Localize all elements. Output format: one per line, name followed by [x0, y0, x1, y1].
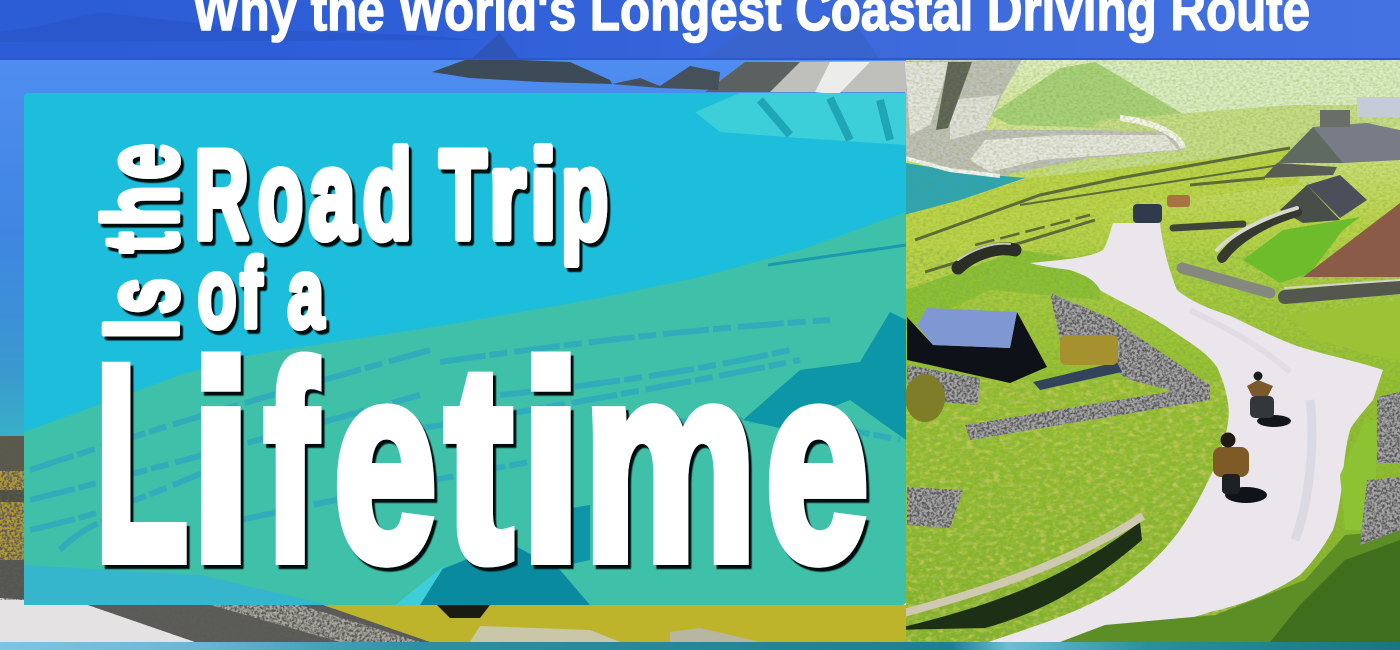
- land on the right: [900, 60, 1400, 642]
- heading: of a: o: [198, 238, 236, 348]
- parked cars: [1133, 195, 1190, 223]
- heading: Lifetime: i: [190, 307, 251, 618]
- top title band: [0, 0, 1400, 60]
- heading: Lifetime: e: [766, 307, 869, 618]
- heading: Road Trip: R: [194, 126, 248, 265]
- heading: Road Trip: d: [363, 126, 412, 265]
- heading: Lifetime: L: [95, 307, 188, 618]
- motorcyclist upper: [1247, 372, 1291, 427]
- heading: Road Trip: T: [440, 126, 486, 265]
- faded hills in band: [0, 12, 480, 42]
- sea: [0, 60, 1400, 445]
- heading: Road Trip: a: [309, 126, 356, 265]
- vertical words: Is the: [83, 144, 200, 339]
- green plot and brown plot: [1243, 203, 1400, 283]
- reflected cliff in panel: [695, 93, 906, 145]
- terrace walls in panel: [30, 320, 900, 550]
- distant sea stacks: [432, 33, 720, 90]
- heading: Road Trip: i: [530, 126, 556, 265]
- dry stone walls upper: [958, 208, 1400, 297]
- motorcyclist lower: [1213, 432, 1267, 503]
- turquoise bay: [900, 162, 1025, 216]
- heading: Lifetime: t: [445, 307, 513, 618]
- vertical words: Is the: t: [83, 232, 200, 253]
- heading: Road Trip: r: [489, 126, 526, 265]
- heading: Road Trip: o: [258, 126, 303, 265]
- photo grain: [906, 60, 1400, 642]
- vertical words: Is the: s: [83, 278, 200, 314]
- cottage with blue roof: [905, 308, 1122, 422]
- heading: of a: f: [240, 238, 262, 348]
- heading: of a: a: [287, 238, 325, 348]
- heading: Lifetime: e: [334, 307, 437, 618]
- road: [988, 223, 1383, 642]
- cottages upper right: [1263, 97, 1400, 223]
- field walls: [915, 148, 1290, 272]
- vertical words: Is the: h: [83, 185, 200, 226]
- dark lower verge: [1060, 530, 1400, 642]
- lower left shore: [0, 436, 906, 642]
- heading: Lifetime: m: [584, 307, 756, 618]
- vertical words: Is the: e: [83, 144, 200, 180]
- heading: Road Trip: p: [561, 126, 608, 265]
- stone wall curving by the road: [800, 516, 1143, 638]
- bright grass highlights: [906, 150, 1300, 290]
- vertical words: Is the: I: [83, 318, 200, 339]
- heading: Lifetime: f: [264, 307, 319, 618]
- grey dry stone wall sections: [906, 290, 1400, 550]
- bottom strip: [0, 642, 1400, 650]
- heading: Lifetime: i: [520, 307, 581, 618]
- shadow shapes in panel: [395, 535, 590, 605]
- translucent teal title panel: [24, 93, 906, 605]
- cliffs: [705, 60, 1185, 176]
- green hillside in panel: [24, 212, 906, 605]
